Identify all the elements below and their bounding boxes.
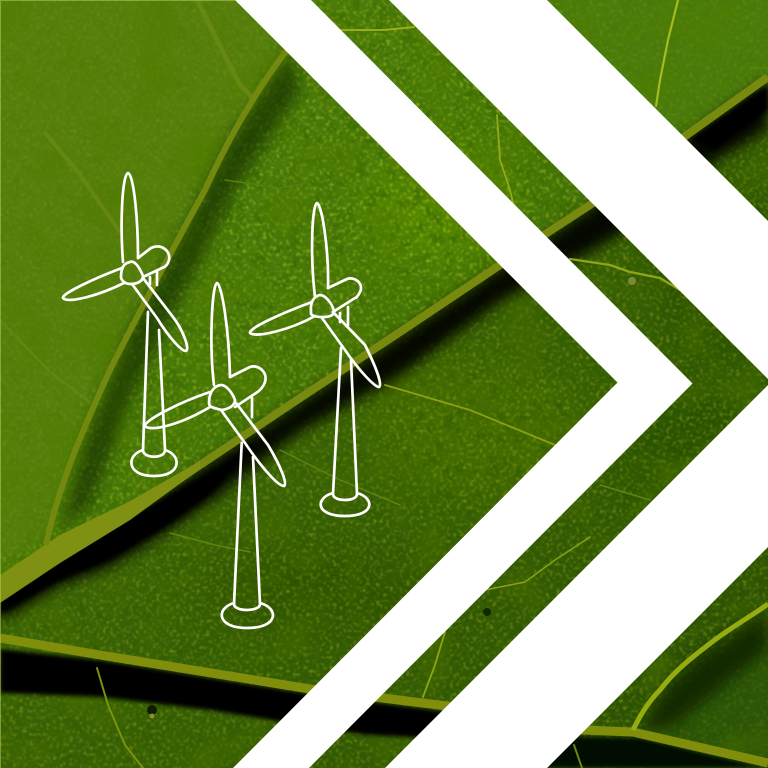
white chevron: outer — [385, 0, 768, 768]
lower right branch vein — [633, 604, 768, 730]
lower vein — [0, 638, 768, 763]
smooth out-of-focus upper-right leaf cell — [540, 0, 768, 190]
smooth out-of-focus lower-right leaf cell — [640, 610, 768, 768]
white chevron: inner — [233, 0, 692, 768]
wind turbines — [63, 173, 380, 628]
light and dark leaf cells — [200, 150, 768, 630]
smooth out-of-focus upper-left leaf cell — [0, 0, 290, 580]
pale edge of the photo — [0, 0, 235, 768]
thick base of main vein — [0, 461, 200, 603]
turbine: centre — [145, 283, 285, 628]
turbine: right — [250, 203, 380, 516]
secondary vein — [46, 50, 287, 545]
main vein — [160, 77, 768, 492]
spots on the leaf — [147, 277, 636, 718]
turbine: left — [63, 173, 187, 476]
